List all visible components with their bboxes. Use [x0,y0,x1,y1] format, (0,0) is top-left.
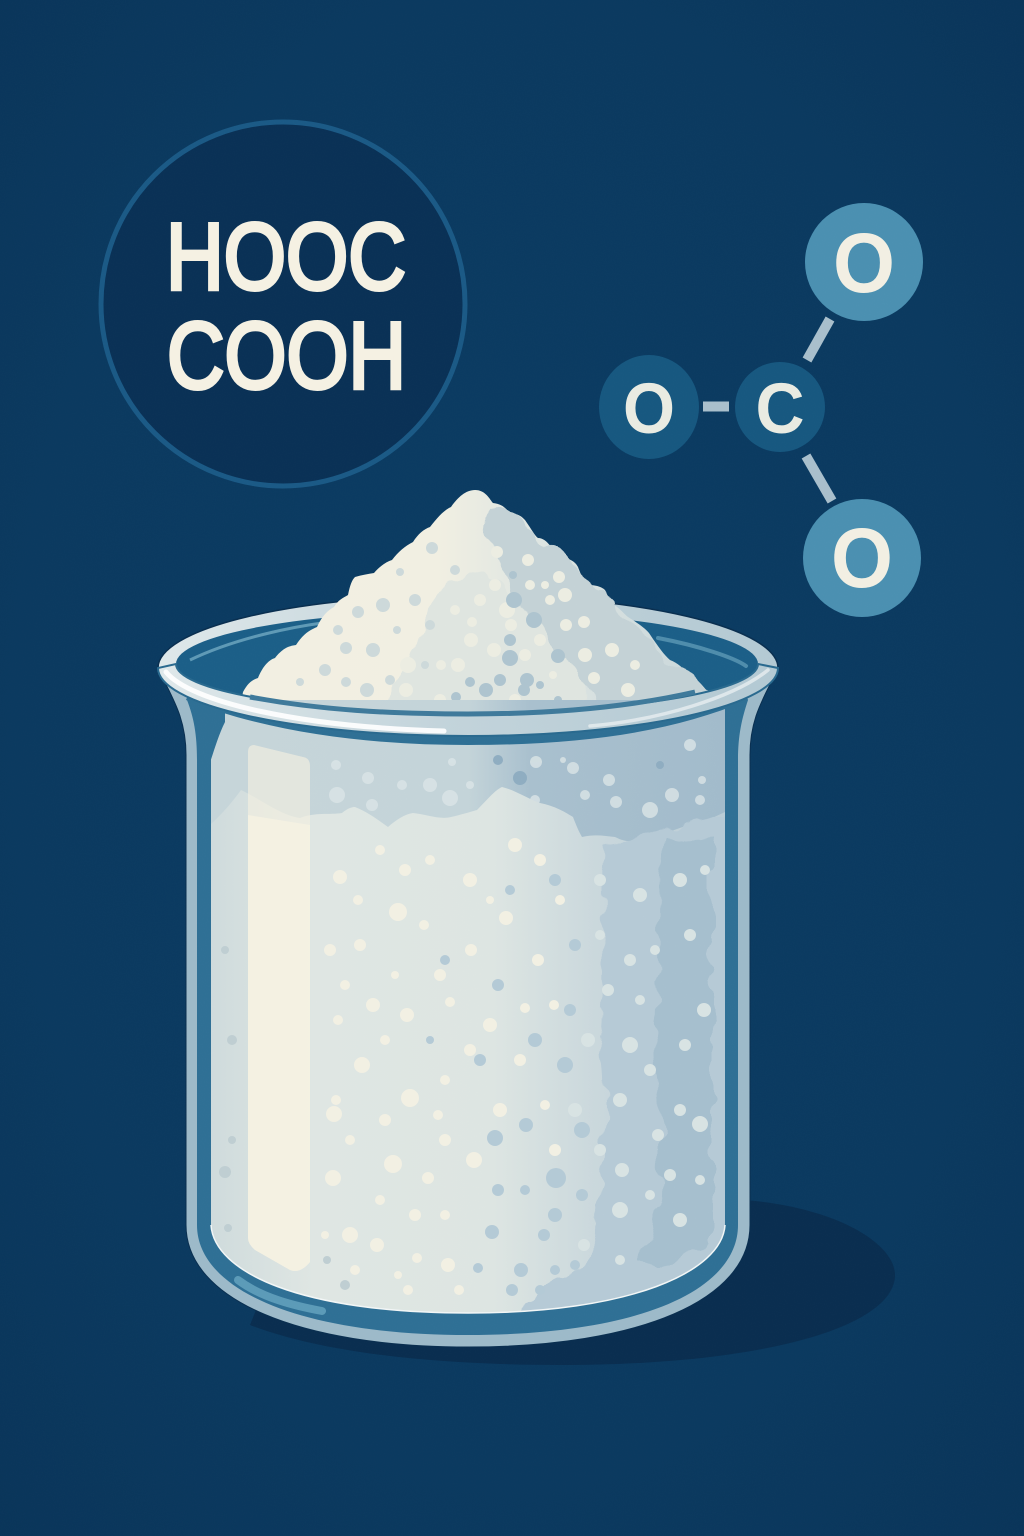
powder fill [205,787,725,1320]
rim highlight left [166,672,444,731]
atom: top oxygen: O [833,216,895,310]
shaded powder region [521,817,714,1311]
beaker shadow [250,1200,895,1365]
beaker with powder [158,490,778,1347]
front rim [158,664,778,736]
contents [205,700,740,1330]
rim highlight right [590,670,768,726]
atom: carbon: C [756,370,804,449]
upper glass haze [211,700,725,842]
formula text: COOH: COOH [167,303,406,409]
rim dark inner edge [250,692,695,714]
bonds [703,319,832,501]
darker right powder [640,835,712,1265]
atom: left oxygen: O [623,370,675,449]
atom: bottom oxygen [803,499,921,617]
infographic illustration [98,120,923,1365]
mound shaded side [487,505,712,720]
bottom glass reflection [238,1280,322,1311]
atom: top oxygen [805,203,923,321]
back rim [158,595,778,736]
faded speckles near the left wall [219,946,350,1290]
powder speckles [321,838,565,1295]
pale speckles on shaded powder [568,865,711,1265]
beaker opening [176,611,758,713]
inner glass edge [211,1225,725,1313]
atom: left oxygen [599,355,699,459]
atom: bottom oxygen: O [831,511,893,605]
dark band under rim [186,690,748,745]
atom: carbon [735,362,825,452]
mound mid shade [388,572,489,700]
glass wall [187,700,748,1335]
molecule diagram [599,203,923,617]
highlight strip [248,745,310,825]
glass body [158,668,778,1347]
powder mound [242,490,708,700]
formula badge [101,122,465,486]
formula text: HOOC: HOOC [166,204,406,310]
upper haze speckles [329,739,706,818]
mound speckles [399,546,640,706]
